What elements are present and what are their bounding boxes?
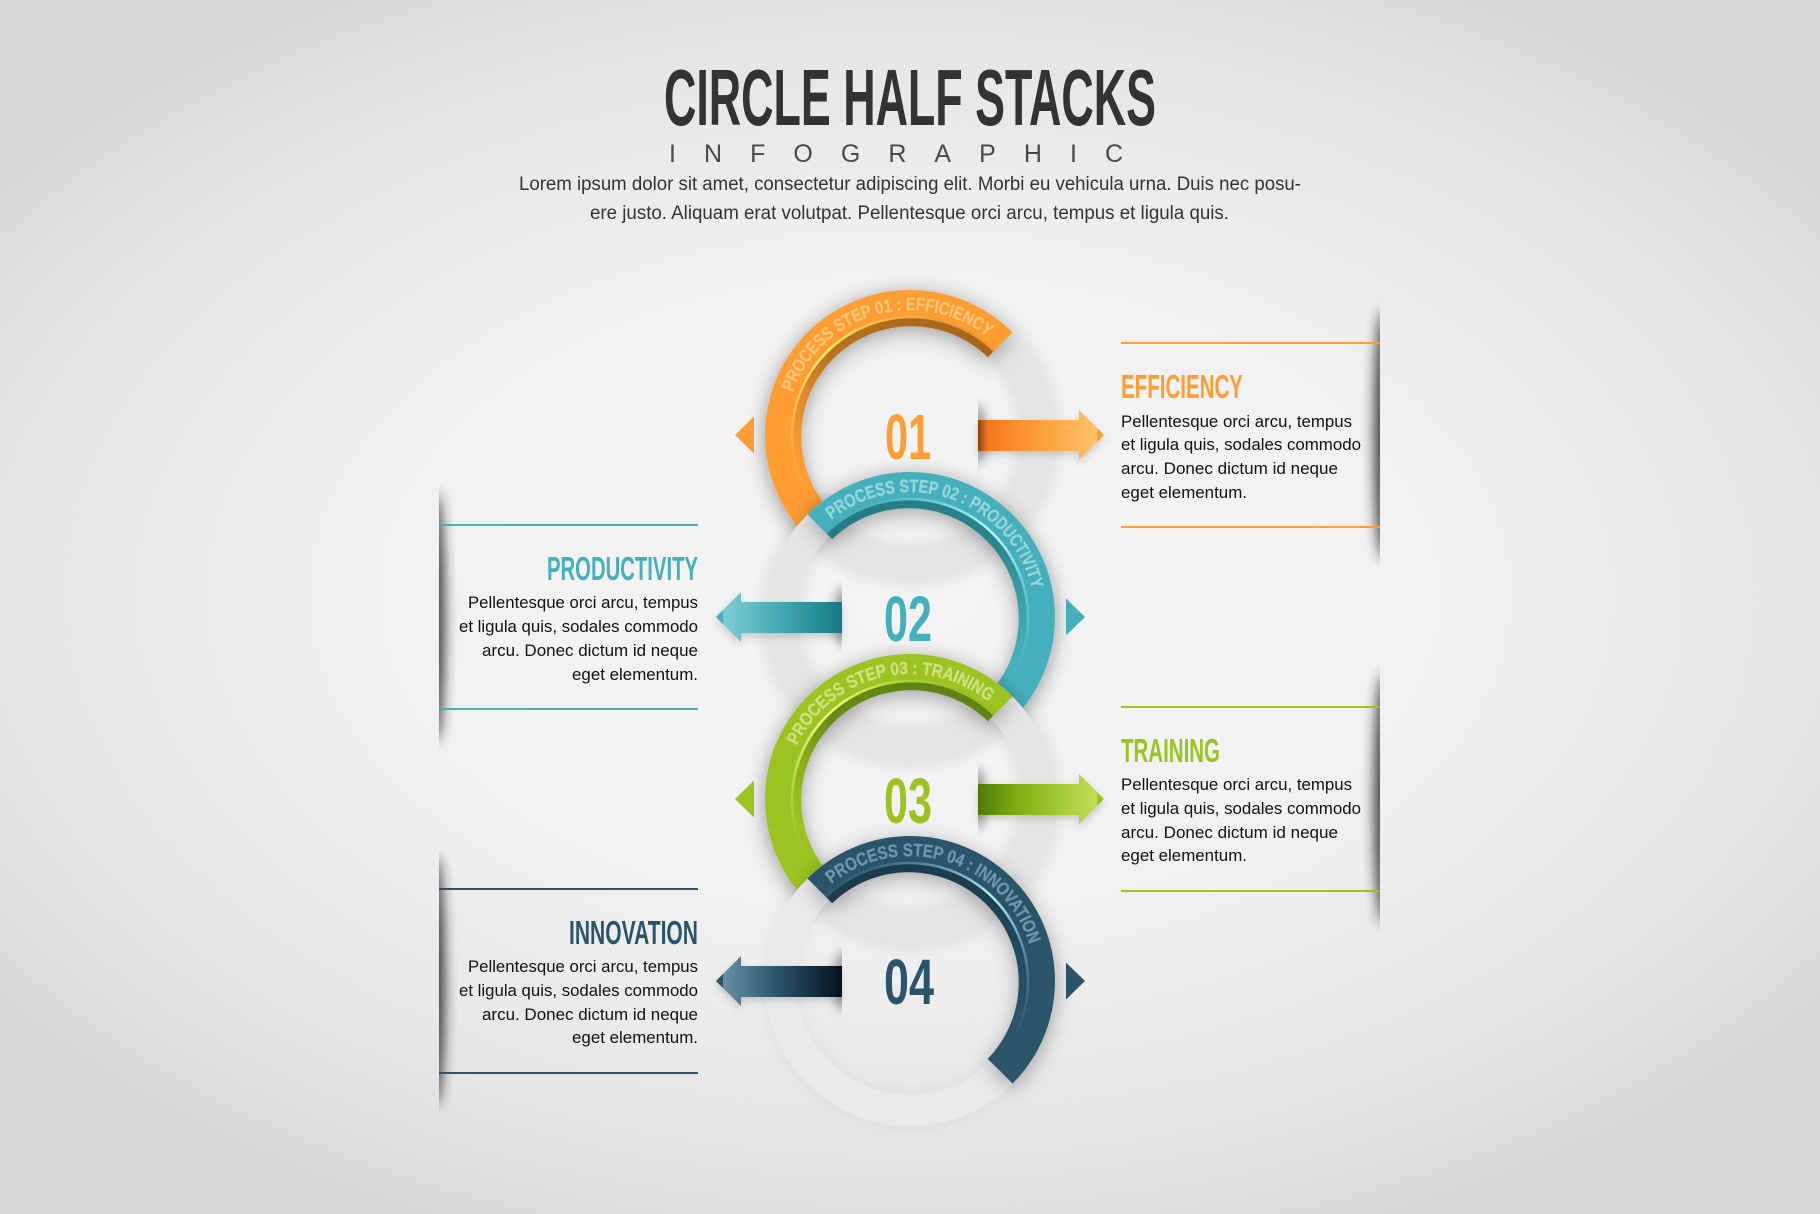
panel: training [1121, 674, 1392, 924]
subtitle: INFOGRAPHIC [669, 140, 1123, 168]
step 04 circle [716, 830, 1085, 1098]
green half arc [782, 671, 1001, 890]
arrow left 04 [716, 951, 850, 1011]
text: training body: arcu. Donec dictum id neque [1121, 823, 1338, 842]
arc label 04: PROCESS STEP 04 : INNOVATION [824, 843, 1041, 944]
text: innovation body: eget elementum. [572, 1028, 698, 1047]
orange half arc [782, 307, 1001, 526]
text: training body [1121, 775, 1361, 865]
text: productivity body: arcu. Donec dictum id neque [482, 641, 698, 660]
triangle right 02 [1066, 598, 1085, 636]
step 02 circle [716, 464, 1085, 766]
text: efficiency body [1121, 412, 1361, 502]
text: innovation body: et ligula quis, sodales commodo [459, 981, 698, 1000]
arc label 01: PROCESS STEP 01 : EFFICIENCY [781, 298, 995, 392]
text: training body: Pellentesque orci arcu, tempus [1121, 775, 1352, 794]
step 03 circle [735, 646, 1104, 948]
gray ring 04 [780, 852, 1040, 1110]
gray ring 02 [780, 488, 1040, 746]
text: training body: et ligula quis, sodales commodo [1121, 799, 1361, 818]
text: productivity body: et ligula quis, sodales commodo [459, 617, 698, 636]
gray ring 01 [780, 306, 1040, 564]
arrow left 02 [716, 587, 850, 647]
heading: efficiency: EFFICIENCY [1121, 368, 1243, 405]
text: innovation body: Pellentesque orci arcu, tempus [468, 957, 698, 976]
heading: innovation: INNOVATION [569, 914, 698, 951]
text: innovation body: arcu. Donec dictum id neque [482, 1005, 698, 1024]
panel: productivity [427, 492, 698, 742]
number 02: 02 [884, 583, 932, 655]
triangle left 01 [735, 416, 754, 454]
text: productivity body: Pellentesque orci arcu, tempus [468, 593, 698, 612]
text: innovation body [459, 957, 698, 1047]
title: CIRCLE HALF STACKS [664, 53, 1156, 142]
number 03: 03 [884, 765, 932, 837]
text: efficiency body: arcu. Donec dictum id neque [1121, 459, 1338, 478]
text: productivity body: eget elementum. [572, 665, 698, 684]
text: efficiency body: et ligula quis, sodales commodo [1121, 435, 1361, 454]
arc label 02: PROCESS STEP 02 : PRODUCTIVITY [824, 479, 1044, 586]
text: efficiency body: Pellentesque orci arcu, tempus [1121, 412, 1352, 431]
step 01 circle [735, 282, 1104, 584]
number 04: 04 [884, 946, 934, 1018]
gray ring 03 [780, 670, 1040, 928]
text: training body: eget elementum. [1121, 846, 1247, 865]
text: efficiency body: eget elementum. [1121, 483, 1247, 502]
intro paragraph [519, 174, 1301, 224]
heading: productivity: PRODUCTIVITY [547, 550, 698, 587]
panel: innovation [427, 856, 698, 1106]
intro paragraph: Lorem ipsum dolor sit amet, consectetur adipiscing elit. Morbi eu vehicula urna. Duis nec posu- [519, 174, 1301, 195]
navy half arc [819, 853, 1038, 1072]
heading: training: TRAINING [1121, 732, 1220, 769]
triangle left 03 [735, 780, 754, 818]
number 01: 01 [885, 401, 931, 473]
panel: efficiency [1121, 310, 1392, 560]
teal half arc [819, 489, 1038, 708]
text: productivity body [459, 593, 698, 684]
arrow right 01 [970, 405, 1104, 465]
arc label 03: PROCESS STEP 03 : TRAINING [786, 662, 994, 745]
intro paragraph: ere justo. Aliquam erat volutpat. Pellentesque orci arcu, tempus et ligula quis. [590, 203, 1229, 224]
triangle right 04 [1066, 962, 1085, 1000]
arrow right 03 [970, 769, 1104, 829]
